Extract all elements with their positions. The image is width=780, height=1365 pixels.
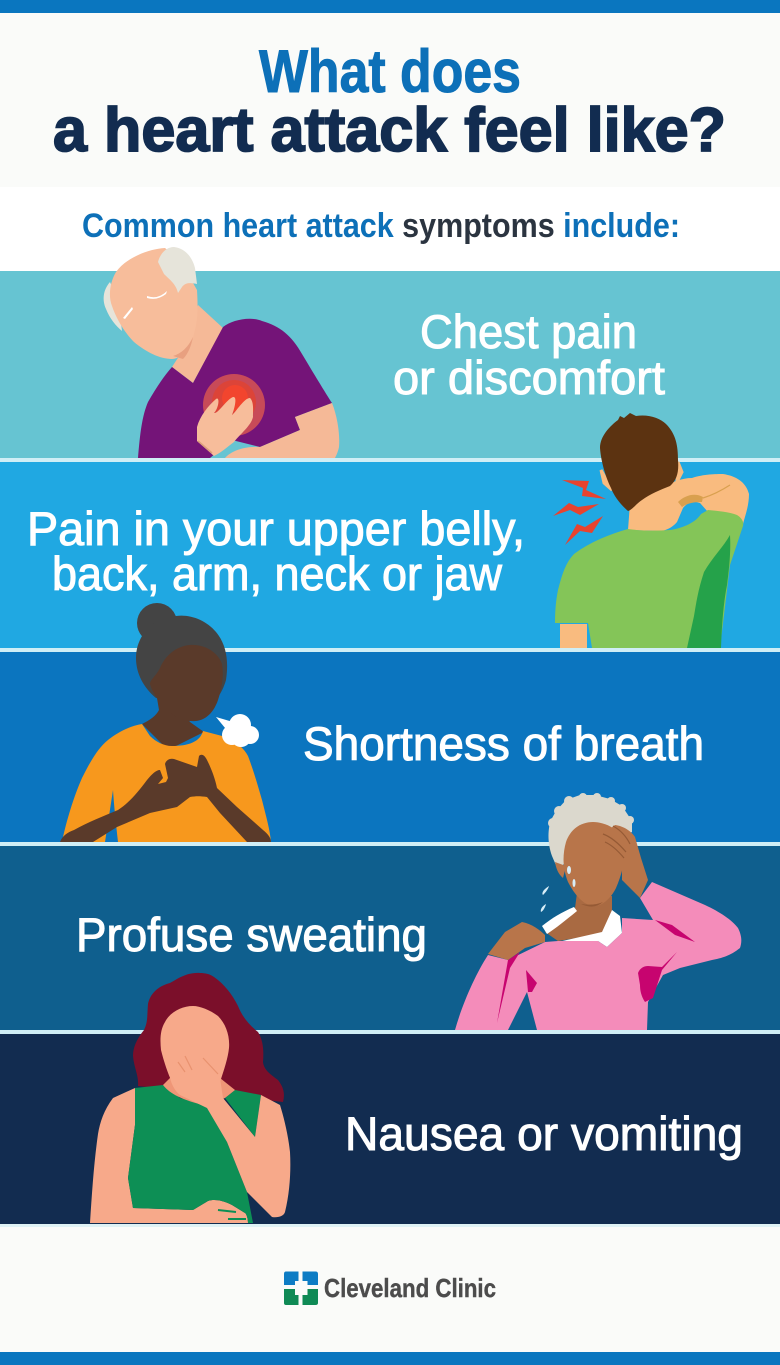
footer panel	[0, 1224, 780, 1365]
panel: nausea or vomiting	[0, 973, 780, 1224]
label: chest pain: Chest pain	[420, 305, 637, 358]
logo: Cleveland Clinic	[284, 1272, 496, 1305]
label: chest pain: or discomfort	[393, 351, 665, 404]
sweat patches	[497, 920, 695, 1023]
panel: profuse sweating	[0, 793, 780, 1030]
title: What does	[259, 38, 521, 105]
panel: upper body pain	[0, 413, 780, 648]
subheading: Common heart attack symptoms include:	[82, 207, 680, 245]
illustration: woman short of breath	[60, 603, 271, 842]
label: profuse sweating: Profuse sweating	[76, 908, 427, 961]
header panel	[0, 0, 780, 187]
title: a heart attack feel like?	[53, 96, 726, 165]
title	[53, 38, 726, 165]
illustration: older man holding chest	[104, 247, 339, 458]
illustration: woman sweating	[455, 793, 741, 1030]
icon: pain zigzags	[553, 480, 606, 545]
icon: sweat drops	[541, 866, 576, 912]
label: upper body pain: Pain in your upper belly,	[27, 502, 525, 555]
sweater	[455, 882, 741, 1030]
label: nausea or vomiting: Nausea or vomiting	[345, 1107, 743, 1160]
label: upper body pain	[27, 502, 525, 600]
panel: shortness of breath	[0, 603, 780, 842]
label: shortness of breath: Shortness of breath	[303, 717, 704, 770]
panel: chest pain	[0, 247, 780, 458]
illustration: man holding neck	[553, 413, 749, 648]
illustration: woman covering mouth	[90, 973, 290, 1223]
icon: breath puff	[216, 714, 259, 747]
logo: Cleveland Clinic: Cleveland Clinic	[324, 1273, 496, 1303]
label: chest pain	[393, 305, 665, 404]
label: upper body pain: back, arm, neck or jaw	[52, 547, 503, 600]
